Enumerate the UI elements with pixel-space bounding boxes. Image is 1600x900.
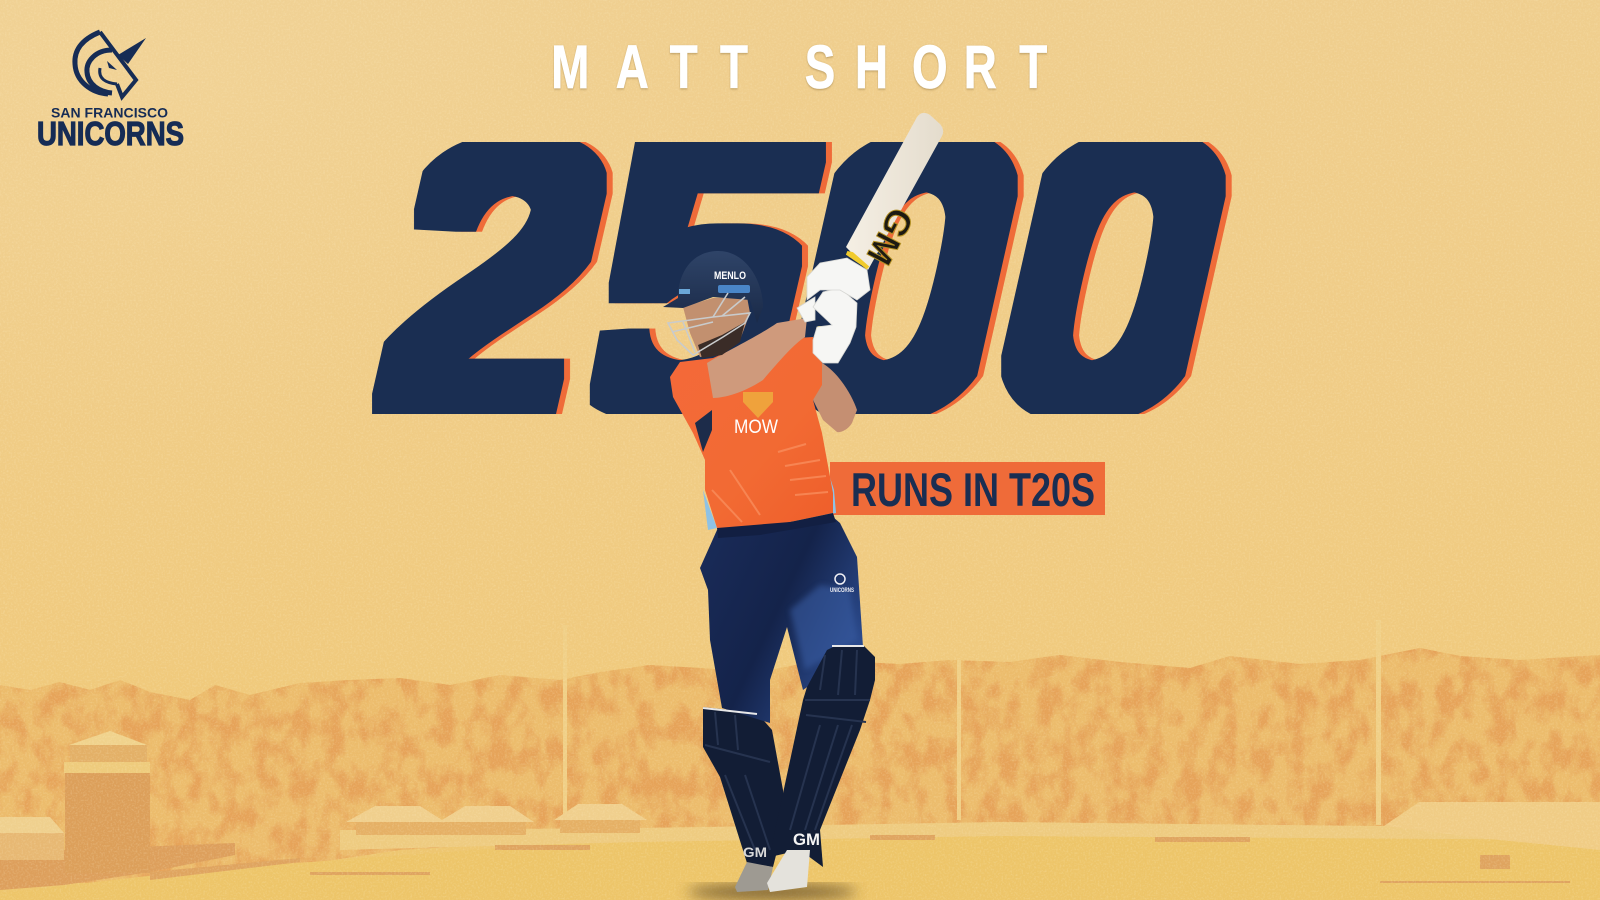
logo text: Unicorns: UNICORNS [37,115,184,152]
side panel light blue [703,430,836,530]
far arm [813,363,857,432]
front leg pad [770,645,875,867]
callout: runs in T20s: RUNS IN T20S [851,463,1095,516]
pants highlight [790,585,858,670]
shirt sponsor: MOW [734,417,778,438]
floodlight poles [563,620,1381,830]
title: player name: MATT SHORT [551,34,1047,102]
boundary boards [150,835,1570,883]
face [683,297,750,357]
pad brand front: GM [793,830,820,849]
scoreboard tower [64,731,150,873]
ground shadow [687,884,857,900]
right stand [1384,802,1600,850]
helmet sponsor: MENLO [714,270,746,282]
big number 2500: 0 [742,61,1069,491]
low building [0,817,235,890]
big number 2500: 0 [950,61,1277,491]
shirt [670,337,833,528]
logo: San Francisco Unicorns [37,32,184,152]
pants logo: UNICORNS [830,587,854,594]
big number 2500 [372,142,1232,414]
bat brand: GM [859,201,922,272]
face grille [668,293,750,355]
shirt folds [712,444,828,522]
gloves [797,258,870,363]
stadium and tree line backdrop [0,648,1600,890]
waistband [717,513,836,538]
big number 2500: 5 [530,61,876,491]
pad ribs [705,650,870,850]
big number 2500: 2 [335,63,651,494]
bat [846,113,943,272]
shirt sponsor [734,392,778,438]
logo text: San Francisco: SAN FRANCISCO [51,104,168,120]
pad brand back: GM [743,844,767,860]
tree line [0,640,1600,890]
pants logo [830,574,854,594]
player: batter [663,113,943,900]
back leg pad [703,707,785,867]
shirt insert [695,410,712,452]
helmet [663,251,763,323]
pavilions [346,804,647,835]
outfield fence [340,820,1600,850]
helmet badge [679,289,690,294]
near arm [707,318,807,398]
icon: unicorn head [75,32,146,97]
pants [700,517,863,723]
lower grip [816,326,831,340]
beard [698,322,745,358]
shoes [735,850,810,892]
grass [0,826,1600,900]
